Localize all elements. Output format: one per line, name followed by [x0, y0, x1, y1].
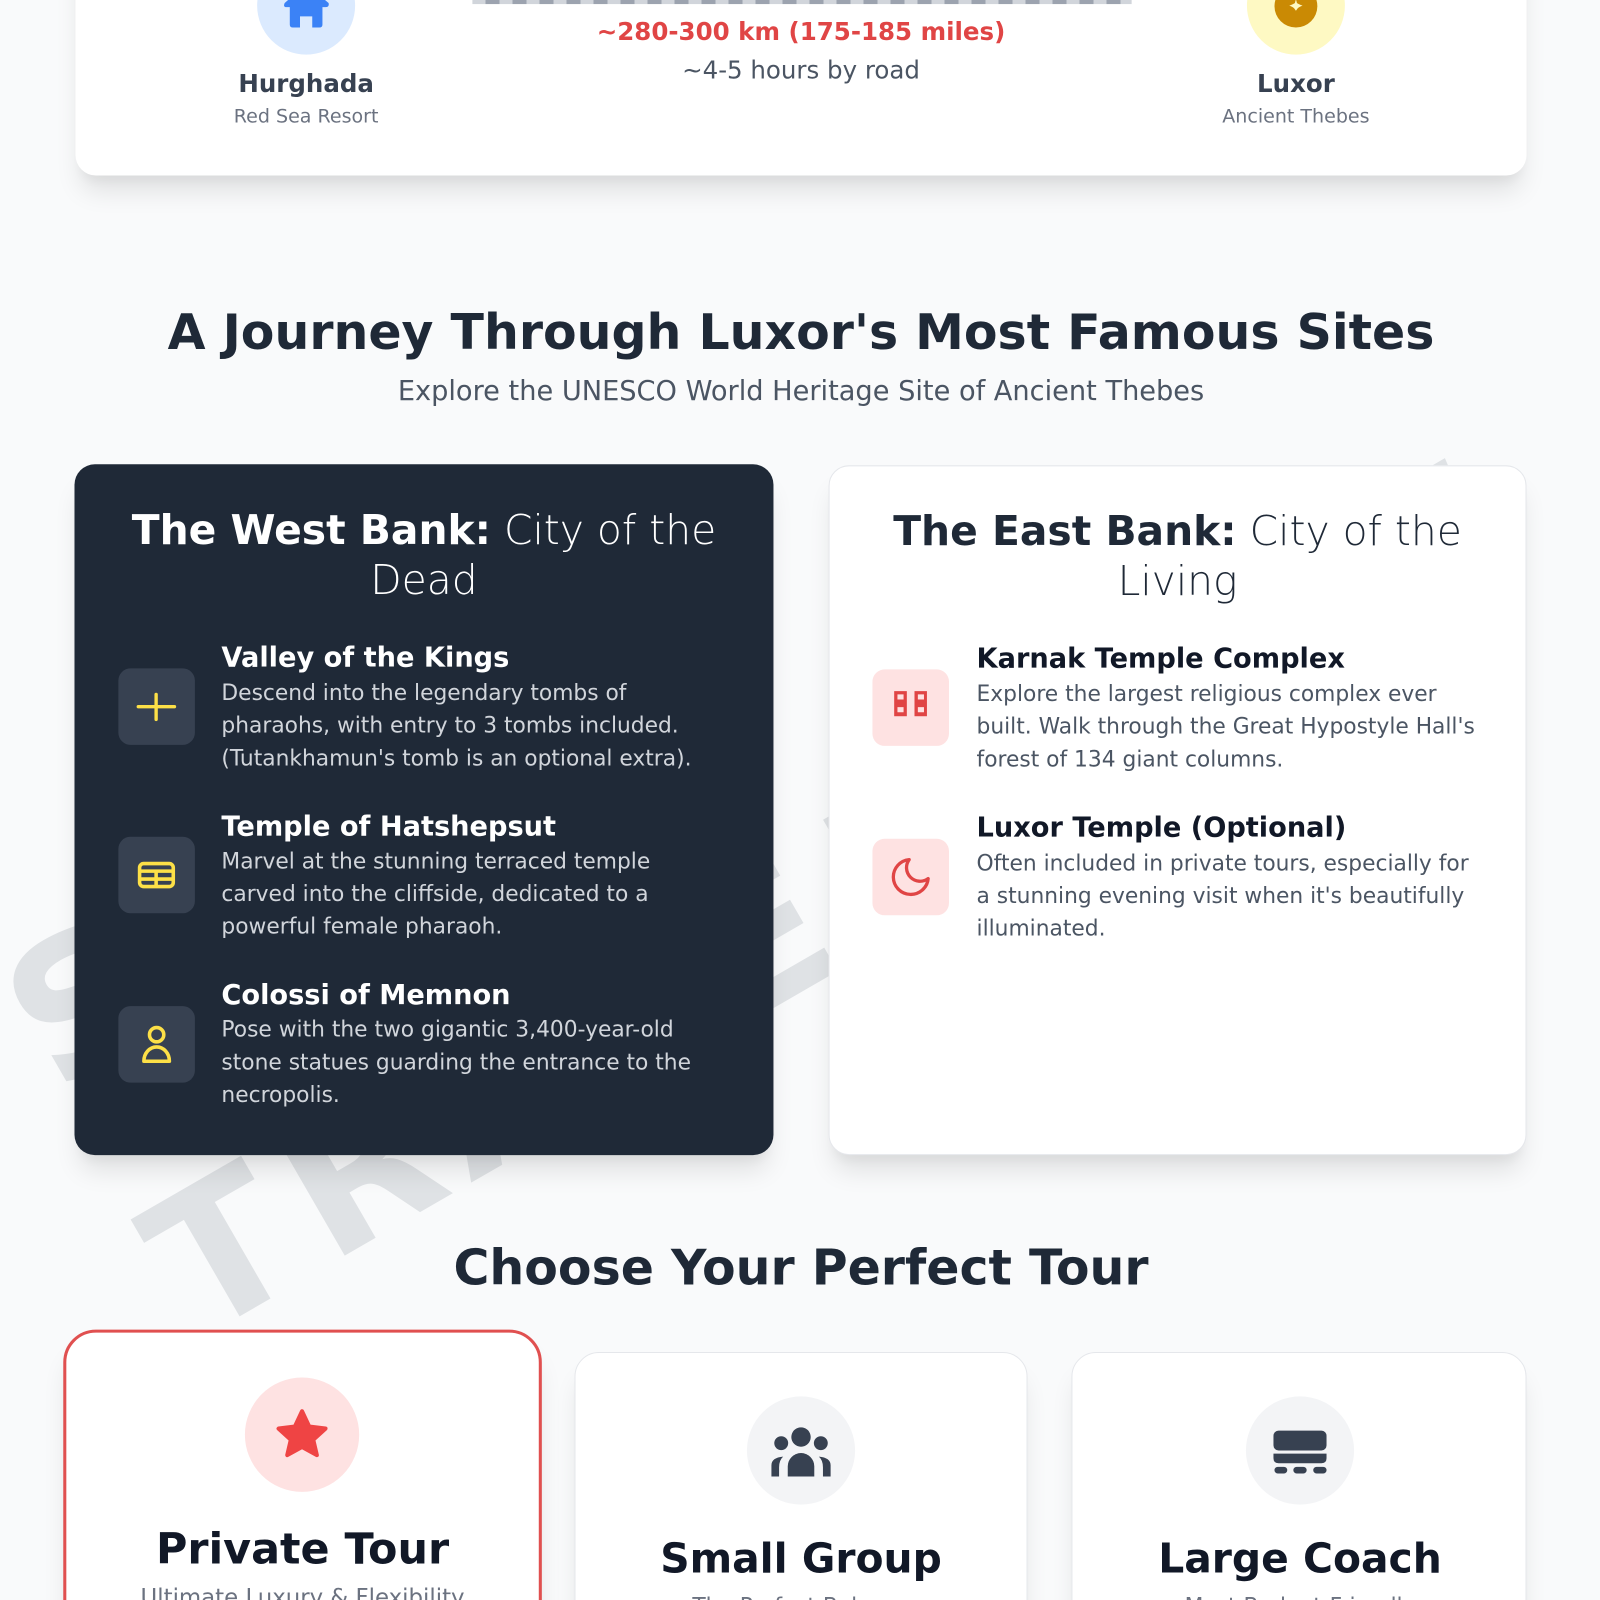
Colossi of Memnon description	[221, 1018, 691, 1109]
Temple of Hatshepsut description	[221, 849, 650, 940]
distance text: ~280-300 km (175-185 miles)	[597, 17, 1005, 46]
Valley of the Kings description: pharaohs, with entry to 3 tombs included.	[221, 713, 679, 738]
Valley of the Kings description: Descend into the legendary tombs of	[221, 680, 626, 706]
icon: table	[118, 837, 195, 913]
West Bank title: Dead	[370, 557, 478, 604]
background watermark: TRAVEL	[111, 727, 1019, 1379]
subheading: famous sites: Explore the UNESCO World Heritage Site of Ancient Thebes	[398, 376, 1204, 407]
Luxor label: Luxor	[1257, 69, 1335, 98]
East Bank title: Living	[1118, 559, 1238, 606]
icon: pillars	[873, 670, 949, 746]
panel: Small Group	[575, 1352, 1027, 1600]
Karnak Temple Complex title: Karnak Temple Complex	[977, 643, 1345, 675]
Luxor Temple title: Luxor Temple (Optional)	[977, 812, 1346, 843]
Small Group title: Small Group	[660, 1536, 942, 1583]
Private Tour title: Private Tour	[156, 1523, 449, 1573]
Large Coach title: Large Coach	[1158, 1536, 1442, 1583]
Temple of Hatshepsut description: powerful female pharaoh.	[221, 914, 502, 940]
heading: famous sites: A Journey Through Luxor's Most Famous Sites	[168, 304, 1434, 361]
East Bank background	[829, 465, 1527, 1155]
panel: Large Coach	[1071, 1352, 1527, 1600]
Temple of Hatshepsut description: Marvel at the stunning terraced temple	[221, 849, 650, 874]
Luxor Temple description	[977, 851, 1469, 941]
Valley of the Kings description	[221, 680, 692, 771]
icon: plus	[118, 668, 195, 745]
Luxor Temple description: a stunning evening visit when it's beautifully	[977, 883, 1464, 909]
Temple of Hatshepsut title: Temple of Hatshepsut	[221, 811, 556, 842]
panel: East Bank	[827, 465, 1528, 1176]
Temple of Hatshepsut description: carved into the cliffside, dedicated to a	[221, 882, 649, 907]
panel: Private Tour	[63, 1330, 541, 1600]
East Bank title: The East Bank: City of the	[893, 509, 1462, 556]
West Bank title: The West Bank: City of the	[132, 507, 716, 554]
heading: choose tour: Choose Your Perfect Tour	[453, 1240, 1149, 1297]
panel: route distance card	[76, 0, 1526, 175]
travel time text: ~4-5 hours by road	[682, 56, 920, 84]
East Bank title	[893, 509, 1462, 606]
West Bank title	[132, 507, 716, 604]
Colossi of Memnon description: Pose with the two gigantic 3,400-year-old	[221, 1018, 674, 1043]
icon: person	[118, 1006, 195, 1082]
Hurghada label: Hurghada	[238, 69, 374, 98]
icon: Luxor sun	[1246, 0, 1345, 55]
Luxor Temple description: illuminated.	[977, 916, 1106, 941]
Luxor Temple description: Often included in private tours, especially for	[977, 851, 1469, 876]
icon: moon	[873, 838, 949, 915]
Karnak Temple Complex description: built. Walk through the Great Hypostyle Hall's	[977, 714, 1475, 740]
Karnak Temple Complex description	[977, 682, 1475, 772]
Colossi of Memnon description: stone statues guarding the entrance to the	[221, 1050, 691, 1076]
Valley of the Kings title: Valley of the Kings	[221, 642, 509, 674]
Hurghada sublabel: Red Sea Resort	[234, 106, 378, 127]
Luxor sublabel: Ancient Thebes	[1222, 106, 1370, 127]
route dashed line	[472, 0, 1132, 4]
Valley of the Kings description: (Tutankhamun's tomb is an optional extra).	[221, 746, 692, 771]
Karnak Temple Complex description: forest of 134 giant columns.	[977, 747, 1283, 772]
icon: Hurghada house	[257, 0, 355, 54]
panel: West Bank	[73, 464, 775, 1176]
Colossi of Memnon title: Colossi of Memnon	[221, 979, 511, 1011]
Karnak Temple Complex description: Explore the largest religious complex ever	[977, 682, 1437, 707]
Colossi of Memnon description: necropolis.	[221, 1083, 340, 1109]
West Bank background	[75, 464, 774, 1155]
